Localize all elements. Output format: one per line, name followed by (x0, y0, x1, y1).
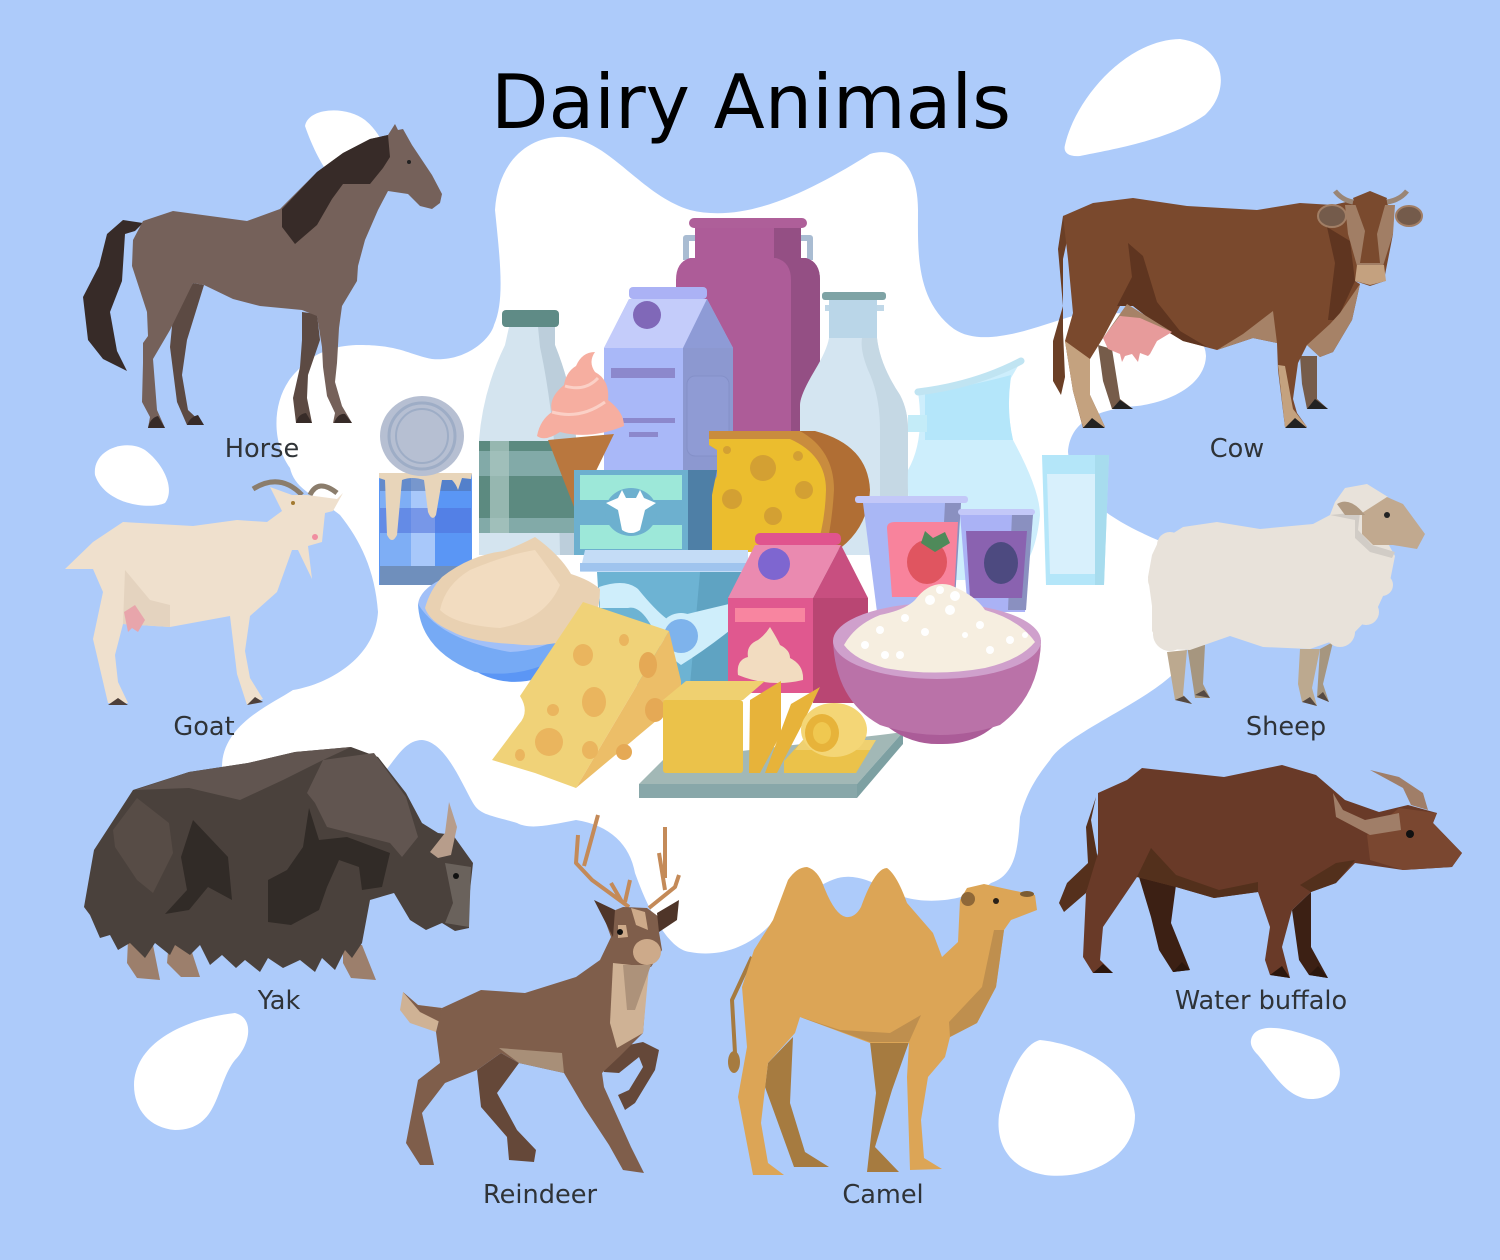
ice cream cone (537, 352, 624, 512)
label: Camel: Camel (842, 1180, 924, 1210)
animal: reindeer (400, 815, 679, 1173)
buffalo hooves (1093, 962, 1328, 978)
cheese wheel (709, 431, 870, 552)
reindeer belly (499, 1048, 564, 1073)
yak face (445, 863, 471, 927)
cow tail (1053, 210, 1093, 395)
buffalo body (1083, 765, 1462, 978)
label: Horse: Horse (225, 434, 299, 464)
animal: goat (65, 482, 343, 705)
goat udder (124, 605, 145, 632)
sheep legs (1187, 642, 1333, 702)
animal: water buffalo (1059, 765, 1462, 978)
milk glass (1042, 455, 1109, 585)
cheese wedge (492, 602, 681, 788)
purple milk can (676, 218, 820, 450)
yogurt tub (580, 550, 748, 685)
cow light legs (1065, 341, 1307, 427)
sheep ear (1337, 502, 1365, 515)
cow shading (1117, 227, 1355, 347)
milk bottle left (479, 310, 576, 555)
blue milk carton (604, 287, 733, 480)
sheep hooves (1175, 690, 1329, 706)
goat hooves (108, 697, 263, 705)
goat shading (123, 570, 170, 627)
buffalo far legs (1139, 868, 1328, 978)
horse tail (83, 220, 143, 371)
label: Cow: Cow (1210, 434, 1264, 464)
reindeer face (618, 908, 648, 938)
milk splash background (95, 39, 1340, 1176)
reindeer body (406, 907, 662, 1173)
yak hooves (127, 940, 376, 980)
cow hooves (1083, 399, 1328, 428)
reindeer chest (610, 963, 649, 1048)
camel face (961, 892, 975, 906)
horse mane (282, 135, 390, 244)
yak horn (430, 802, 457, 858)
goat body (65, 487, 343, 705)
camel far legs (765, 1037, 909, 1172)
buffalo head (1367, 808, 1462, 870)
label: Reindeer: Reindeer (483, 1180, 597, 1210)
buffalo belly shade (1137, 848, 1355, 898)
animal: horse (83, 124, 442, 428)
horse far legs (170, 283, 320, 425)
sheep wool (1148, 484, 1395, 651)
buffalo horns (1333, 793, 1401, 835)
glass pitcher (908, 361, 1040, 580)
condensed milk can (379, 396, 472, 585)
blackberry yogurt cup (958, 509, 1035, 612)
cow udder (1103, 316, 1172, 362)
buffalo tail (1059, 797, 1098, 912)
cow far legs (1098, 345, 1328, 409)
cow head (1318, 191, 1422, 285)
label: Sheep: Sheep (1246, 712, 1326, 742)
label: Water buffalo: Water buffalo (1175, 986, 1347, 1016)
milk bottle right (800, 292, 908, 555)
reindeer far hind leg (477, 1053, 536, 1162)
butter board (639, 681, 903, 798)
camel tail (732, 957, 752, 1053)
pink carton (728, 533, 868, 703)
yak light fur (135, 747, 418, 857)
horse body (132, 124, 442, 428)
reindeer ears (594, 900, 679, 937)
title: Dairy Animals (491, 59, 1011, 146)
reindeer tail (400, 992, 442, 1032)
animal: sheep (1148, 484, 1425, 706)
cow body (1063, 198, 1393, 428)
dairy products group (379, 218, 1109, 798)
sheep head (1362, 497, 1425, 549)
sheep collar (1330, 512, 1395, 558)
goat horns (253, 482, 337, 495)
strawberry yogurt cup (855, 496, 968, 612)
animal: yak (84, 747, 473, 980)
camel body (738, 867, 1037, 1175)
label: Yak: Yak (257, 986, 300, 1016)
label: Goat: Goat (173, 712, 235, 742)
yak body (84, 747, 473, 972)
reindeer antlers (576, 815, 679, 908)
reindeer raised leg (604, 1042, 659, 1110)
butter box with cow logo (574, 470, 717, 555)
horse hooves (148, 413, 352, 428)
cream bowl (418, 537, 600, 682)
cottage cheese bowl (833, 584, 1041, 744)
yak dark fur (165, 808, 390, 925)
animal: cow (1053, 191, 1422, 428)
camel shading (800, 930, 1004, 1042)
animal: camel (728, 867, 1037, 1175)
